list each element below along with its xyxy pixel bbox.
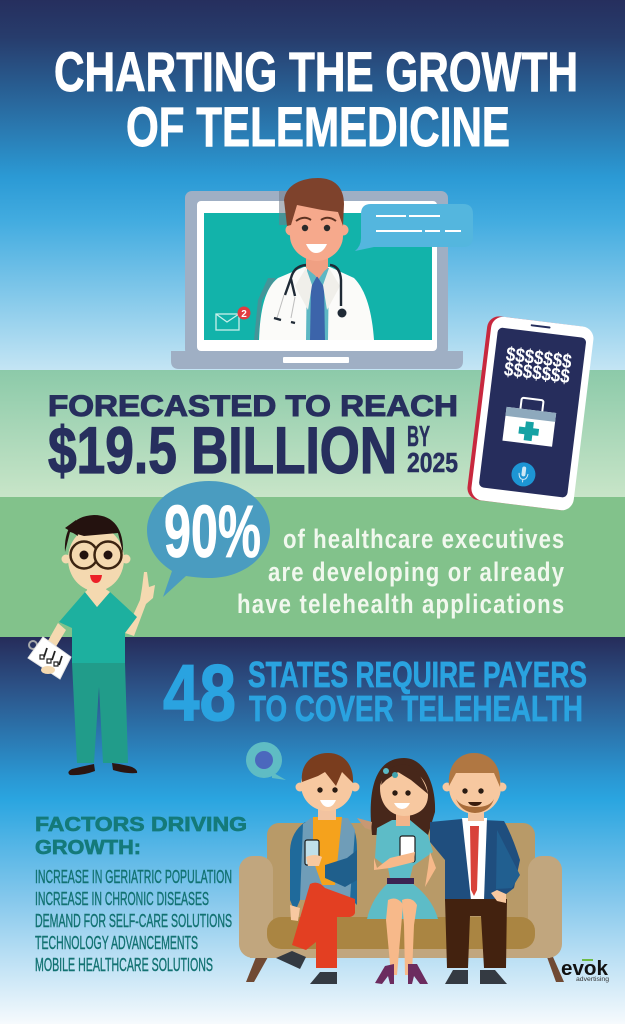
speech bubble: 90% xyxy=(147,481,270,597)
couch xyxy=(239,823,564,982)
logo: evok advertising: evok xyxy=(561,958,609,980)
shoes xyxy=(68,764,95,775)
dollar signs: $$$$$$$ xyxy=(503,358,571,388)
illustration: nurse xyxy=(28,515,155,775)
factors heading xyxy=(35,814,247,859)
forecast heading: 2025 xyxy=(407,447,458,478)
nurse arms xyxy=(125,572,155,636)
background: statistic band xyxy=(0,497,625,637)
factors heading: GROWTH: xyxy=(35,837,141,859)
statistic text: healthcare executives: of healthcare executives xyxy=(283,525,564,555)
illustration: three people on a couch xyxy=(239,753,564,984)
phone screen xyxy=(479,327,587,498)
speech bubble xyxy=(355,204,473,251)
forecast heading: BY xyxy=(407,421,430,453)
forecast heading: $19.5 BILLION xyxy=(48,413,397,487)
illustration: smartphone xyxy=(466,315,595,512)
title: OF TELEMEDICINE xyxy=(126,95,510,158)
dollar signs xyxy=(503,343,573,388)
factors list: INCREASE IN CHRONIC DISEASES xyxy=(35,889,209,909)
glasses xyxy=(70,542,122,568)
clipboard xyxy=(28,637,71,679)
factors heading: FACTORS DRIVING xyxy=(35,814,247,836)
mail icon with badge: 2 xyxy=(241,309,247,320)
factors list: MOBILE HEALTHCARE SOLUTIONS xyxy=(35,955,213,975)
illustration: laptop with doctor xyxy=(171,178,473,369)
teal screen area xyxy=(204,213,432,340)
scrub top xyxy=(59,592,137,663)
logo: evok advertising: advertising xyxy=(576,977,609,983)
statistic text: healthcare executives: have telehealth applications xyxy=(237,590,564,620)
statistic text: healthcare executives: are developing or already xyxy=(268,558,564,588)
laptop base xyxy=(171,351,463,369)
factors list xyxy=(35,867,232,975)
laptop lid xyxy=(185,191,448,356)
title xyxy=(54,40,578,158)
icon: small chat bubble xyxy=(246,742,286,780)
doctor xyxy=(254,178,374,340)
laptop screen xyxy=(197,201,437,351)
trousers xyxy=(72,663,128,763)
phone body xyxy=(466,315,594,512)
mail icon with badge xyxy=(216,306,250,330)
background: sky gradient xyxy=(0,0,625,370)
forecast heading: FORECASTED TO REACH xyxy=(48,390,458,423)
background: forecast band xyxy=(0,370,625,497)
factors list: INCREASE IN GERIATRIC POPULATION xyxy=(35,867,232,887)
statistic text: 48 states xyxy=(163,648,587,737)
background: lower gradient xyxy=(0,637,625,1024)
statistic text: 48 states: 48 xyxy=(163,648,236,737)
head xyxy=(87,582,106,594)
person: left man xyxy=(276,753,360,984)
factors list: TECHNOLOGY ADVANCEMENTS xyxy=(35,933,198,953)
person: woman xyxy=(357,758,438,984)
speech bubble: 90%: 90% xyxy=(164,490,261,573)
mouth xyxy=(90,575,102,583)
microphone button xyxy=(510,461,537,488)
statistic text: healthcare executives xyxy=(237,525,564,620)
medical kit icon xyxy=(502,396,558,447)
person: right man xyxy=(430,753,520,984)
factors list: DEMAND FOR SELF-CARE SOLUTIONS xyxy=(35,911,232,931)
dollar signs: $$$$$$$ xyxy=(505,343,573,373)
